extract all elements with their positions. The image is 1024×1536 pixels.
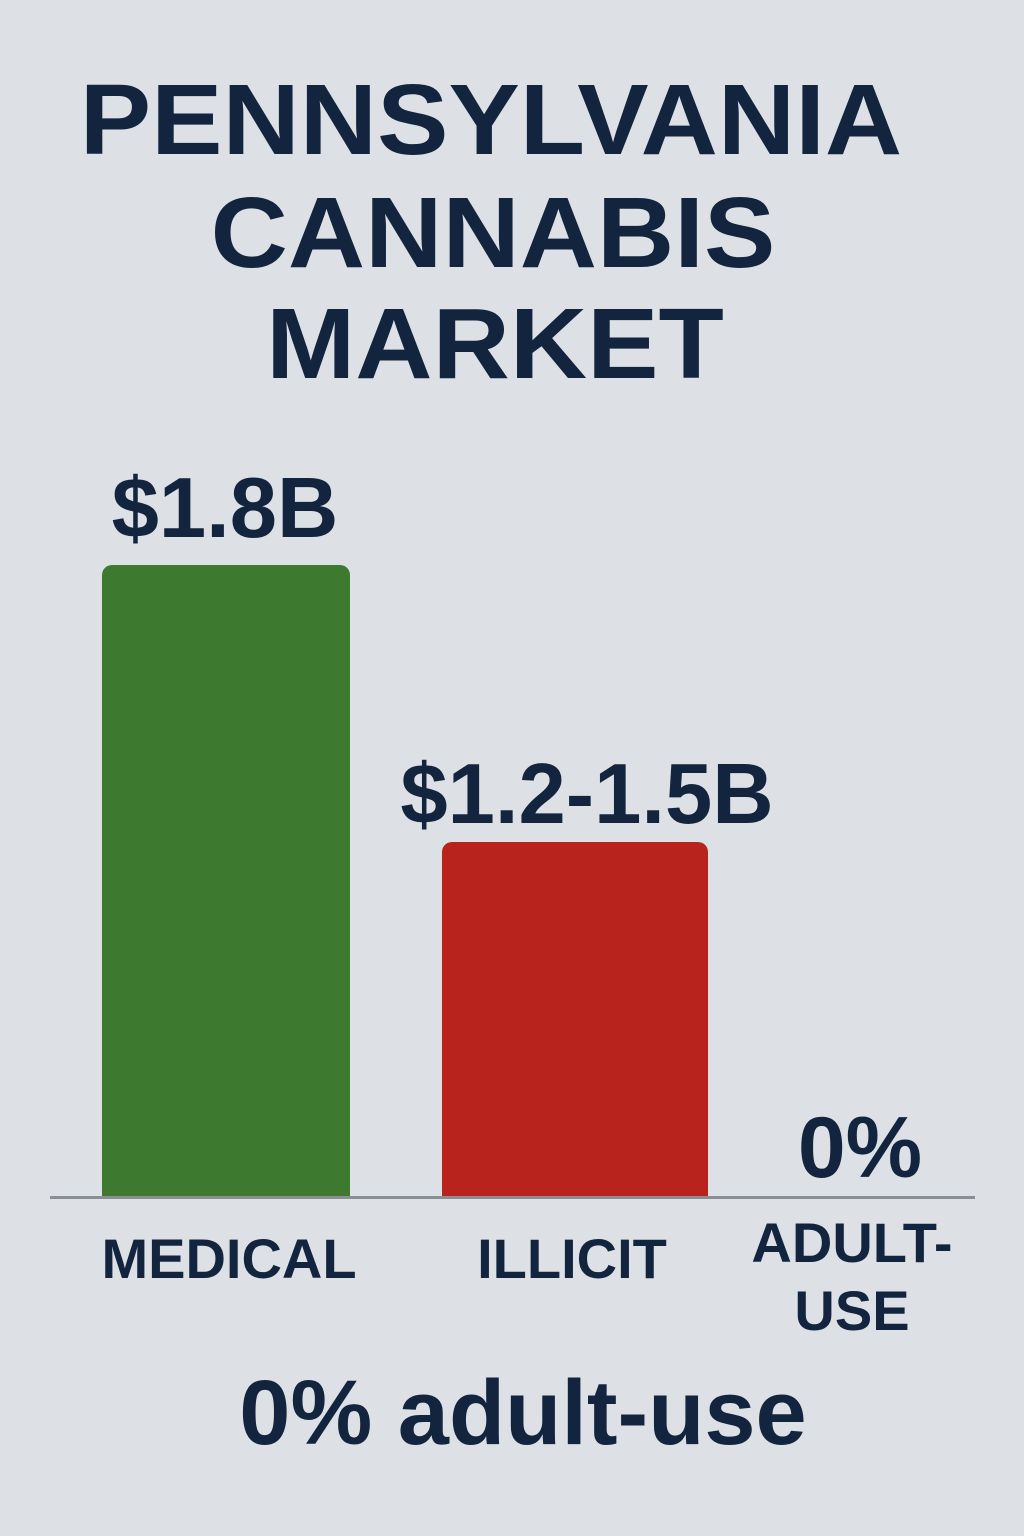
title: MARKET — [266, 288, 724, 400]
category label: adult-use: ADULT- — [751, 1211, 953, 1274]
bar: medical — [102, 565, 350, 1197]
category label: illicit: ILLICIT — [477, 1227, 667, 1290]
footer caption: 0% adult-use — [239, 1362, 807, 1464]
title: PENNSYLVANIA — [80, 64, 902, 176]
category label: medical: MEDICAL — [101, 1227, 357, 1290]
value label: illicit: $1.2-1.5B — [400, 747, 774, 842]
bar: illicit — [442, 842, 708, 1197]
title — [80, 64, 902, 400]
category label: adult-use — [751, 1211, 953, 1342]
category label: adult-use: USE — [794, 1279, 910, 1342]
axis line — [50, 1196, 975, 1199]
value label: adult-use: 0% — [798, 1100, 922, 1196]
title: CANNABIS — [211, 177, 775, 289]
value label: medical: $1.8B — [112, 461, 338, 556]
